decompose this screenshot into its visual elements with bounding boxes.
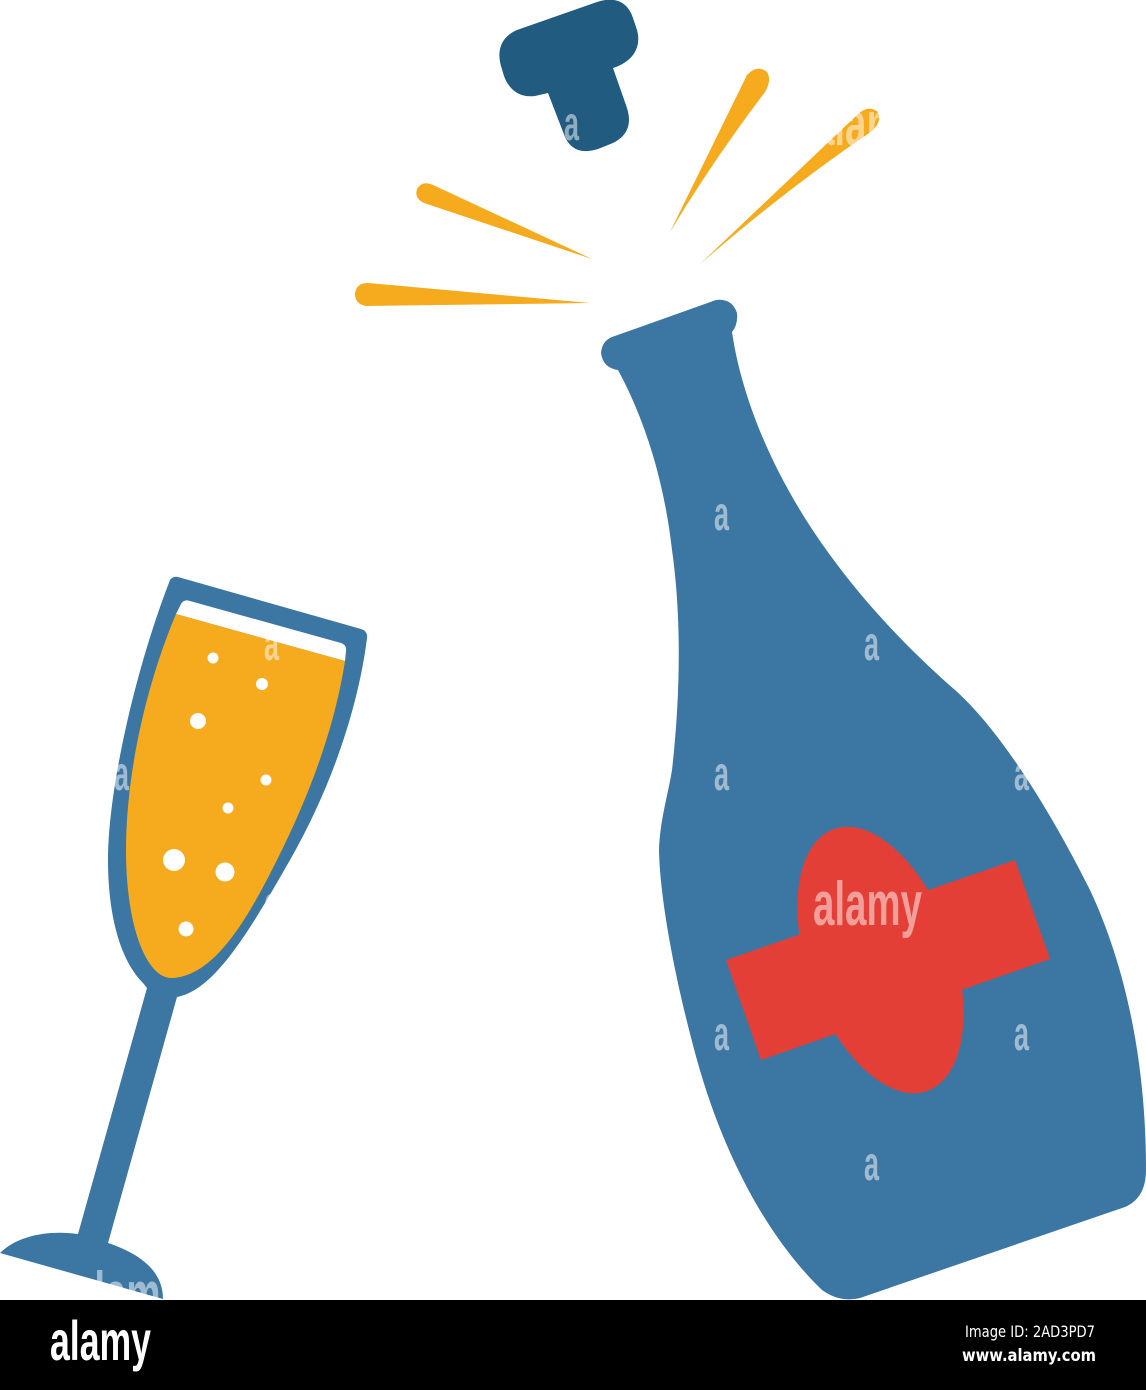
bottle label: red band bbox=[726, 860, 1050, 1060]
icon: spray lines bbox=[355, 69, 879, 306]
icon: champagne glass bbox=[0, 577, 367, 1299]
bottle label: red oval bbox=[765, 805, 996, 1115]
watermark: small marks: a bbox=[714, 1008, 729, 1061]
website: www.alamy.com bbox=[962, 1346, 1096, 1366]
watermark: small marks: a bbox=[1014, 748, 1029, 801]
watermark: small marks: a bbox=[714, 488, 729, 541]
watermark: large alamy marks: alamy bbox=[813, 870, 922, 939]
watermark: small marks bbox=[114, 98, 1029, 1191]
watermark: small marks: a bbox=[714, 748, 729, 801]
glass outline, stem and foot bbox=[0, 577, 367, 1299]
image id: Image ID: 2AD3PD7 bbox=[965, 1322, 1095, 1341]
watermark: small marks: a bbox=[864, 1138, 879, 1191]
icon: champagne bottle bbox=[601, 300, 1146, 1299]
watermark: small marks: a bbox=[264, 878, 279, 931]
watermark: large alamy marks: alamy bbox=[73, 1260, 182, 1329]
watermark: large alamy marks bbox=[73, 90, 922, 1329]
champagne liquid bbox=[126, 614, 345, 978]
watermark: large alamy marks: alamy bbox=[813, 90, 922, 159]
icon: cork bbox=[499, 0, 638, 151]
glass inner white bbox=[176, 600, 346, 661]
footer bar bbox=[0, 1300, 1146, 1390]
watermark: small marks: a bbox=[264, 618, 279, 671]
footer logo: alamy bbox=[50, 1309, 151, 1372]
watermark: small marks: a bbox=[564, 98, 579, 151]
watermark: small marks: a bbox=[1014, 1008, 1029, 1061]
watermark: small marks: a bbox=[864, 618, 879, 671]
bubbles bbox=[163, 652, 272, 936]
watermark: small marks: a bbox=[114, 748, 129, 801]
